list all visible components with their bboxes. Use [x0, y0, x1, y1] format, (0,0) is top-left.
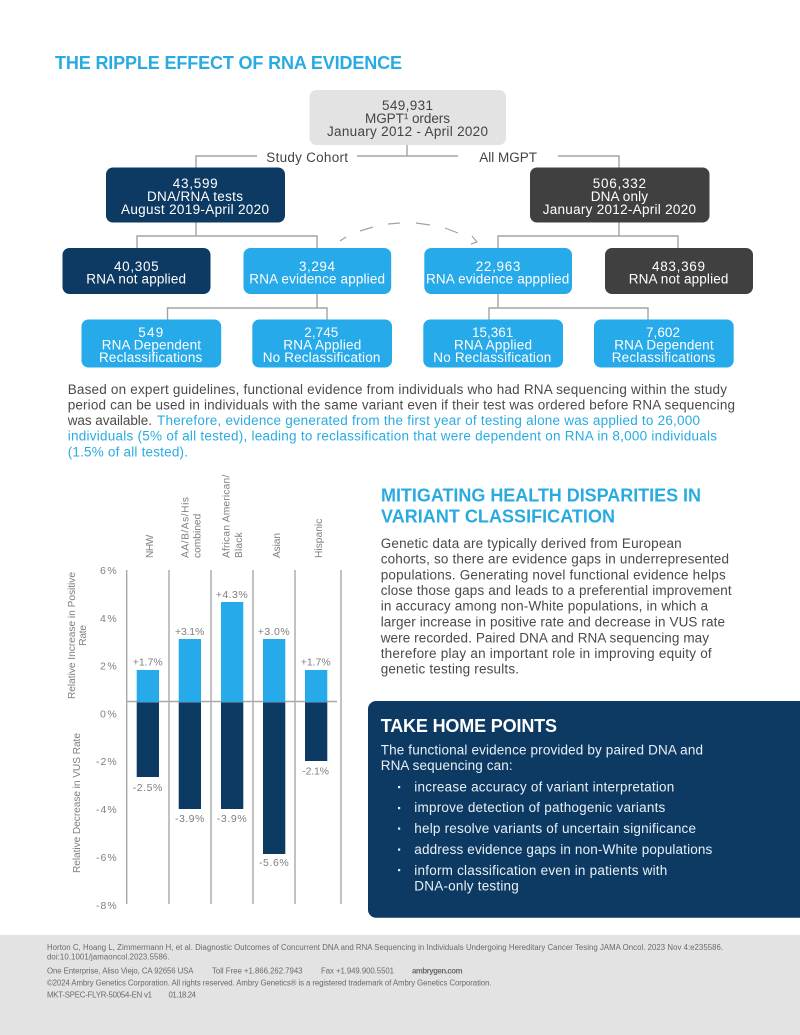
y axis title: positive rate	[67, 572, 89, 699]
contact line: One Enterprise, Aliso Viejo, CA 92656 USA	[47, 966, 194, 976]
box: all orders: MGPT¹ orders	[365, 111, 450, 126]
category labels	[145, 475, 325, 558]
text block: expert guidelines: was available.	[67, 413, 152, 428]
box: 2,745 no reclassification: 2,745	[304, 325, 338, 340]
value labels: negative: -5.6%	[259, 857, 289, 869]
panel intro	[381, 742, 703, 773]
citation: Horton C, Hoang L, Zimmermann H, et al. Diagnostic Outcomes of Concurrent DNA and RNA Sequencing in Individuals Undergoing Hereditary Cancer Tesing JAMA Oncol. 2023 Nov 4:e235586.	[47, 943, 723, 952]
text block: expert guidelines: Therefore, evidence generated from the first year of testing alone was applied to 26,000	[157, 413, 700, 428]
y axis tick labels: -8%	[96, 900, 117, 912]
box: DNA/RNA tests: DNA/RNA tests	[147, 189, 243, 204]
y axis title: positive rate: Rate	[78, 625, 89, 646]
box: 7,602 reclassifications: Reclassifications	[612, 350, 716, 365]
category labels: Black	[234, 531, 245, 558]
label: study cohort: Study Cohort	[266, 150, 348, 165]
box: RNA not applied, all MGPT: 483,369	[652, 259, 705, 274]
bullet list: help resolve variants of uncertain significance	[414, 821, 696, 836]
box: 15,361 no reclassification: RNA Applied	[454, 338, 532, 353]
category labels: African American/	[222, 475, 232, 558]
footer	[0, 935, 800, 1035]
text block: health disparities: genetic testing results.	[381, 662, 519, 677]
text block: health disparities: larger increase in positive rate and decrease in VUS rate	[381, 614, 725, 629]
copyright: ©2024 Ambry Genetics Corporation. All rights reserved. Ambry Genetics® is a registered trademark of Ambry Genetics Corporation.	[47, 978, 492, 988]
text block: expert guidelines: (1.5% of all tested).	[68, 445, 188, 460]
title: THE RIPPLE EFFECT OF RNA EVIDENCE	[55, 53, 402, 73]
y axis tick labels: 2%	[100, 660, 117, 672]
box: 7,602 reclassifications: 7,602	[646, 325, 680, 340]
box: 15,361 no reclassification: No Reclassification	[433, 350, 551, 365]
box: 549 reclassifications: RNA Dependent	[102, 338, 201, 353]
text block: health disparities: in accuracy among non-White populations, in which a	[381, 599, 708, 614]
y axis tick labels: 4%	[100, 613, 117, 625]
bullet list: improve detection of pathogenic variants	[414, 800, 666, 815]
text block: health disparities: therefore play an important role in improving equity of	[381, 646, 712, 661]
box: DNA only	[530, 168, 710, 222]
bullet list: increase accuracy of variant interpretation	[414, 779, 674, 794]
box: DNA/RNA tests: 43,599	[173, 176, 218, 191]
value labels: negative	[133, 766, 329, 869]
bullet list: address evidence gaps in non-White populations	[414, 842, 713, 857]
value labels: negative: -2.1%	[302, 766, 329, 778]
box: all orders	[310, 90, 506, 145]
bullet list: DNA-only testing	[414, 878, 519, 893]
box: all orders: 549,931	[382, 98, 433, 113]
text block: expert guidelines: individuals (5% of all tested), leading to reclassification that were dependent on RNA in 8,000 individuals	[68, 429, 717, 444]
box: RNA evidence applied, study: 3,294	[299, 259, 335, 274]
value labels: positive: +1.7%	[301, 656, 331, 668]
box: 549 reclassifications: 549	[138, 325, 163, 340]
category labels: Hispanic	[314, 519, 325, 558]
text block: expert guidelines	[67, 382, 735, 460]
value labels: negative: -2.5%	[133, 782, 162, 794]
text block: health disparities	[380, 536, 732, 677]
citation: doi:10.1001/jamaoncol.2023.5586.	[47, 952, 170, 962]
box: DNA/RNA tests: August 2019-April 2020	[121, 202, 269, 217]
bars: VUS rate	[137, 702, 327, 854]
panel: take home points	[368, 701, 800, 918]
y axis title: positive rate: Relative Increase in Positive	[67, 572, 78, 699]
contact line: ambrygen.com	[412, 966, 463, 976]
box: RNA evidence applied, study	[244, 248, 391, 294]
text block: health disparities: close those gaps and leads to a preferential improvement	[381, 583, 732, 598]
box: all orders: January 2012 - April 2020	[327, 124, 488, 139]
y axis tick labels: 6%	[100, 565, 117, 577]
box: 15,361 no reclassification: 15,361	[472, 325, 513, 340]
connector: root to cohorts	[196, 145, 619, 168]
bullet list	[398, 779, 713, 893]
bar chart	[67, 475, 341, 912]
contact line: Toll Free +1.866.262.7943	[212, 966, 302, 976]
panel intro: The functional evidence provided by paired DNA and	[381, 742, 703, 757]
box: RNA evidence applied, study: RNA evidence applied	[249, 272, 385, 286]
box: RNA not applied, study: 40,305	[114, 259, 159, 274]
arrow: dashed curve from study evidence to all MGPT evidence	[340, 223, 477, 244]
box: 2,745 no reclassification: RNA Applied	[283, 338, 361, 353]
box: 15,361 no reclassification	[423, 320, 563, 368]
text block: health disparities: populations. Generating novel functional evidence helps	[381, 567, 726, 582]
box: RNA evidence applied, all MGPT: RNA evidence appplied	[426, 272, 569, 286]
value labels: positive	[133, 589, 331, 668]
box: RNA evidence applied, all MGPT: 22,963	[476, 259, 520, 274]
connector: applied to reclassifications left	[168, 294, 327, 320]
value labels: positive: +1.7%	[133, 656, 163, 668]
value labels: positive: +3.1%	[175, 626, 204, 638]
value labels: negative: -3.9%	[175, 813, 204, 825]
box: 7,602 reclassifications: RNA Dependent	[614, 338, 714, 353]
y axis tick labels	[96, 565, 117, 912]
label: all MGPT: All MGPT	[479, 150, 537, 165]
box: 2,745 no reclassification: No Reclassification	[263, 350, 380, 365]
category labels: Asian	[272, 533, 283, 558]
text block: expert guidelines: period can be used in individuals with the same variant even if their test was ordered before RNA sequencing	[68, 398, 735, 412]
contact line	[47, 966, 463, 976]
category labels: NHW	[145, 534, 156, 558]
document code: 01.18.24	[168, 990, 197, 1000]
panel intro: RNA sequencing can:	[381, 758, 513, 773]
flowchart	[62, 90, 753, 368]
box: RNA not applied, study	[62, 248, 210, 294]
connector: applied to reclassifications right	[489, 294, 648, 320]
citation	[47, 943, 723, 962]
text block: health disparities: were recorded. Paired DNA and RNA sequencing may	[380, 630, 709, 645]
heading: mitigating health disparities: MITIGATING HEALTH DISPARITIES IN	[381, 486, 701, 506]
text block: health disparities: cohorts, so there are evidence gaps in underrepresented	[381, 552, 729, 567]
box: 549 reclassifications: Reclassifications	[99, 350, 203, 365]
value labels: positive: +4.3%	[216, 589, 248, 601]
box: 2,745 no reclassification	[252, 320, 392, 368]
box: DNA only: 506,332	[593, 176, 646, 191]
y axis tick labels: 0%	[100, 708, 117, 720]
y axis tick labels: -4%	[96, 804, 117, 816]
category labels: AA/B/As/His	[180, 497, 192, 558]
box: RNA not applied, study: RNA not applied	[86, 272, 186, 286]
value labels: negative: -3.9%	[217, 813, 247, 825]
heading: mitigating health disparities	[381, 486, 701, 526]
bullet list: inform classification even in patients with	[414, 863, 667, 878]
heading: mitigating health disparities: VARIANT CLASSIFICATION	[381, 506, 615, 526]
box: DNA only: January 2012-April 2020	[543, 202, 696, 217]
bars: positive rate	[137, 602, 327, 702]
panel heading: TAKE HOME POINTS	[381, 716, 557, 736]
text block: health disparities: Genetic data are typically derived from European	[381, 536, 682, 551]
connector: study cohort to second row	[137, 222, 317, 248]
box: DNA/RNA tests	[106, 168, 285, 222]
connector: all MGPT to second row	[498, 222, 678, 248]
box: RNA not applied, all MGPT	[605, 248, 753, 294]
document code: MKT-SPEC-FLYR-50054-EN v1	[47, 990, 152, 1000]
chart gridlines	[127, 570, 341, 904]
y axis tick labels: -6%	[96, 852, 117, 864]
category labels: combined	[193, 513, 204, 558]
value labels: positive: +3.0%	[258, 626, 290, 638]
box: RNA evidence applied, all MGPT	[424, 248, 572, 294]
box: RNA not applied, all MGPT: RNA not applied	[629, 272, 728, 286]
text block: expert guidelines: Based on expert guidelines, functional evidence from individuals who had RNA sequencing within the study	[68, 382, 727, 397]
box: 549 reclassifications	[82, 320, 221, 368]
y axis title: VUS rate: Relative Decrease in VUS Rate	[72, 733, 83, 873]
box: 7,602 reclassifications	[594, 320, 734, 368]
y axis tick labels: -2%	[96, 756, 117, 768]
box: DNA only: DNA only	[591, 189, 648, 204]
contact line: Fax +1.949.900.5501	[321, 966, 394, 976]
